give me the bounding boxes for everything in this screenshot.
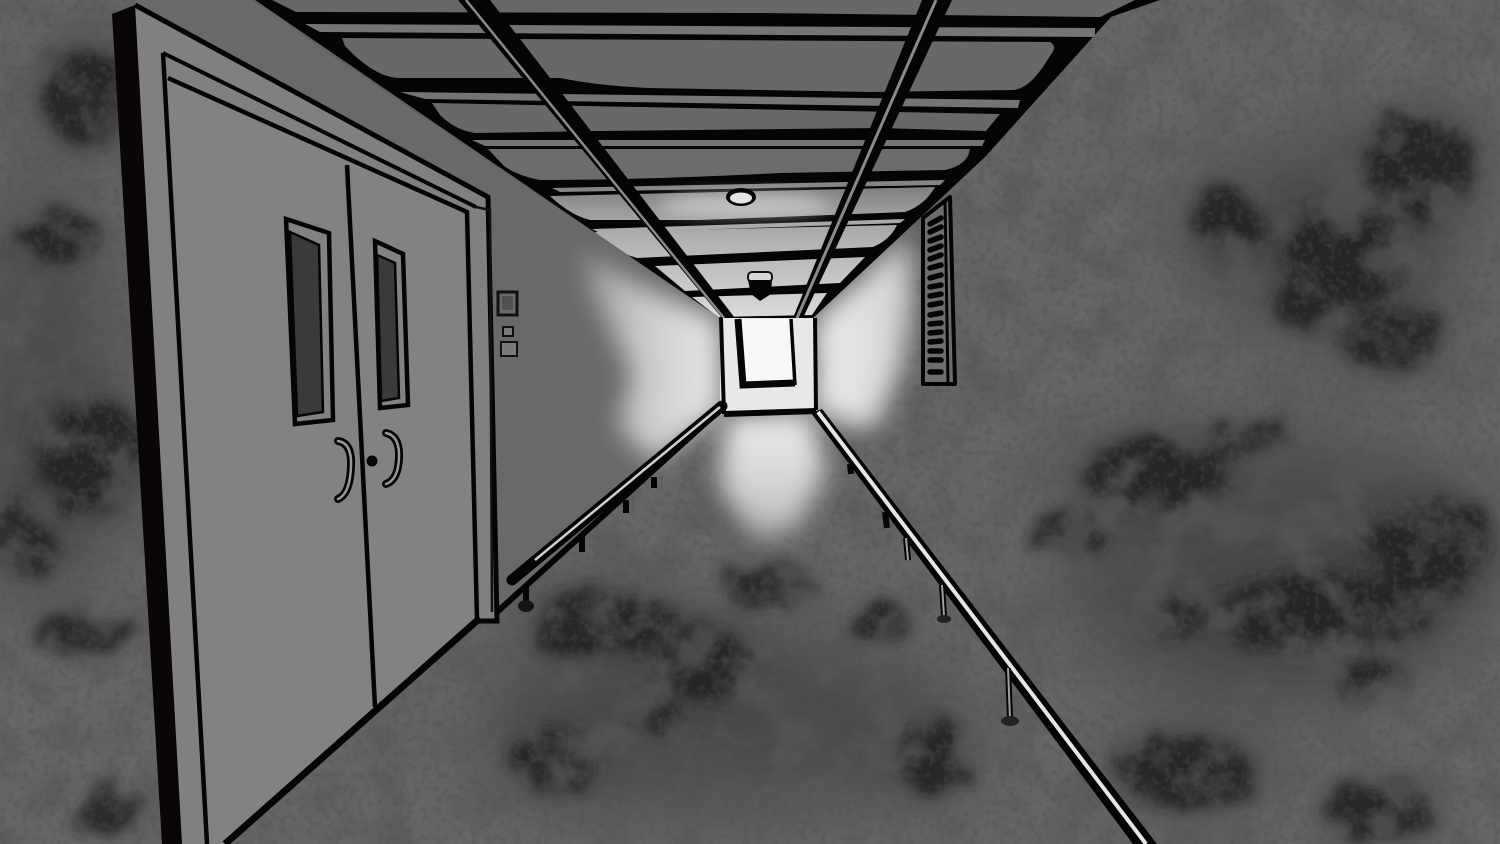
- right door window: [375, 241, 408, 408]
- security camera: [748, 272, 772, 301]
- left door handle: [338, 441, 351, 499]
- right door handle: [386, 433, 399, 484]
- wall vent panel: [923, 197, 955, 384]
- door frame: [112, 5, 497, 844]
- ceiling light: [726, 188, 756, 206]
- left handrail: [497, 406, 722, 612]
- door frame dark edge: [112, 5, 182, 844]
- ceiling rail: left: [458, 0, 735, 318]
- door centre seam: [347, 165, 375, 707]
- left corridor wall: [135, 0, 720, 615]
- ceiling rail: right: [793, 0, 952, 318]
- ceiling: [255, 0, 1160, 318]
- floor line: [225, 618, 480, 844]
- door lock: [366, 456, 378, 466]
- right handrail: [811, 409, 1157, 844]
- corridor end wall: [720, 318, 816, 414]
- wall controls: [498, 292, 517, 356]
- left door window: [286, 219, 333, 424]
- end door: [738, 319, 795, 386]
- ceiling panels: [272, 0, 1135, 317]
- double door leaves: [168, 78, 477, 844]
- glow: light on walls and floor from corridor end: [580, 236, 914, 540]
